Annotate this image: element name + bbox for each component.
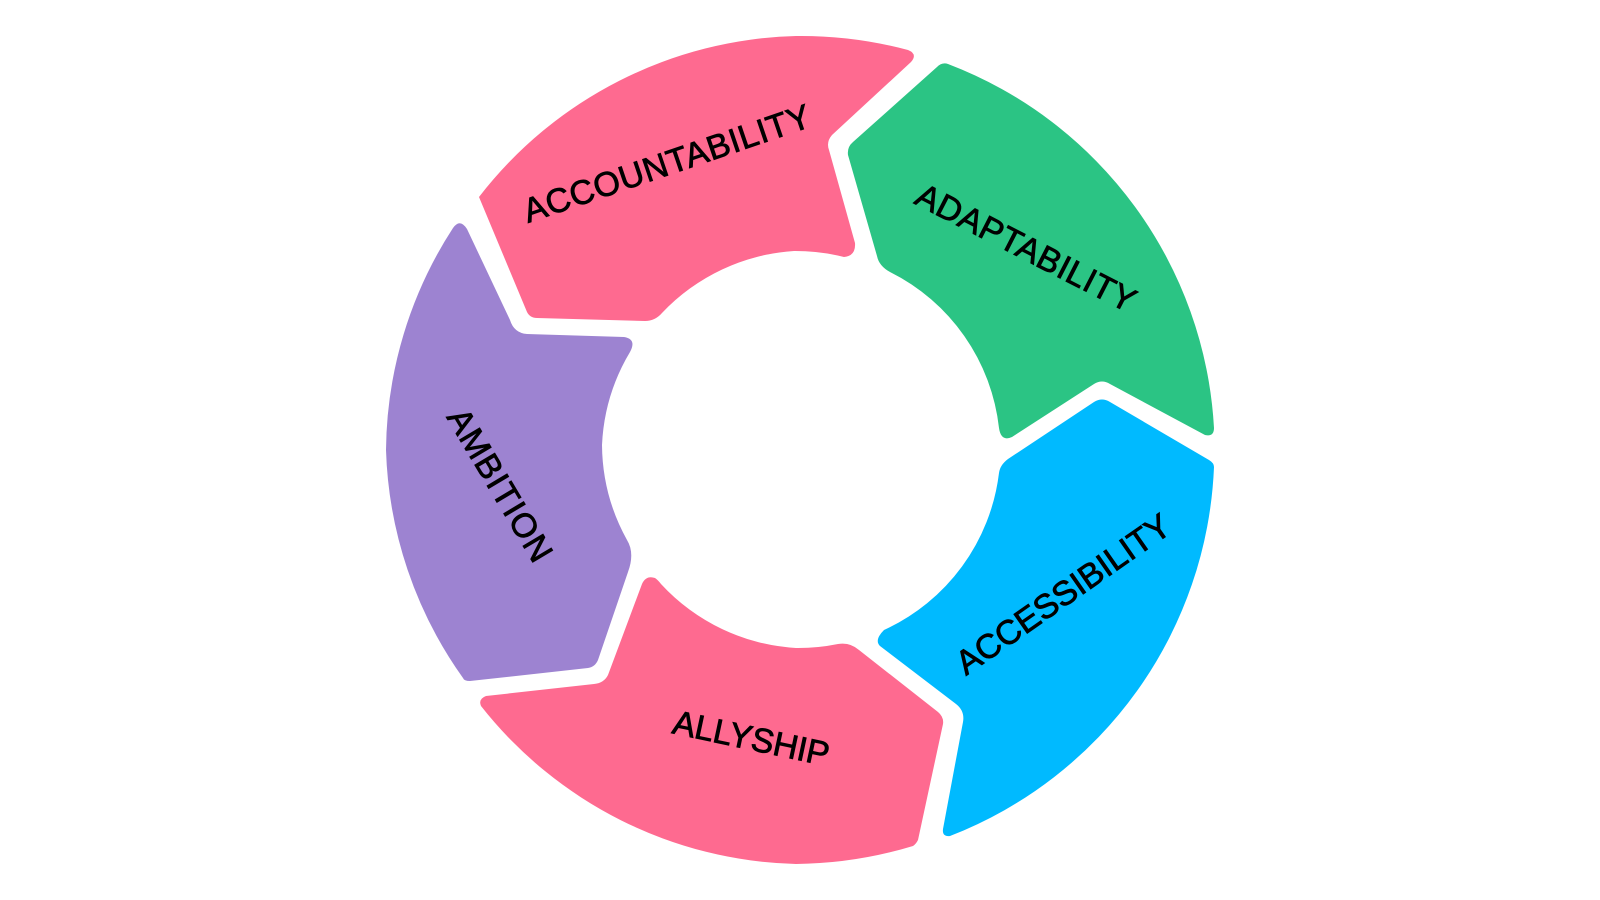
panel: adaptability segment [848, 63, 1214, 438]
segment shape: adaptability [848, 63, 1214, 438]
segment shape: allyship [480, 577, 943, 864]
label: ambition: AMBITION [439, 402, 560, 569]
panel: accessibility segment [878, 400, 1214, 836]
label: allyship: ALLYSHIP [669, 704, 833, 774]
panel: accountability segment [479, 36, 914, 321]
segment shape: ambition [386, 223, 632, 681]
panel: allyship segment [480, 577, 943, 864]
segment shape: accountability [479, 36, 914, 321]
label: accountability: ACCOUNTABILITY [518, 98, 816, 231]
panel: ambition segment [386, 223, 632, 681]
label: accessibility: ACCESSIBILITY [949, 507, 1178, 683]
segment shape: accessibility [878, 400, 1214, 836]
label: adaptability: ADAPTABILITY [909, 176, 1142, 320]
